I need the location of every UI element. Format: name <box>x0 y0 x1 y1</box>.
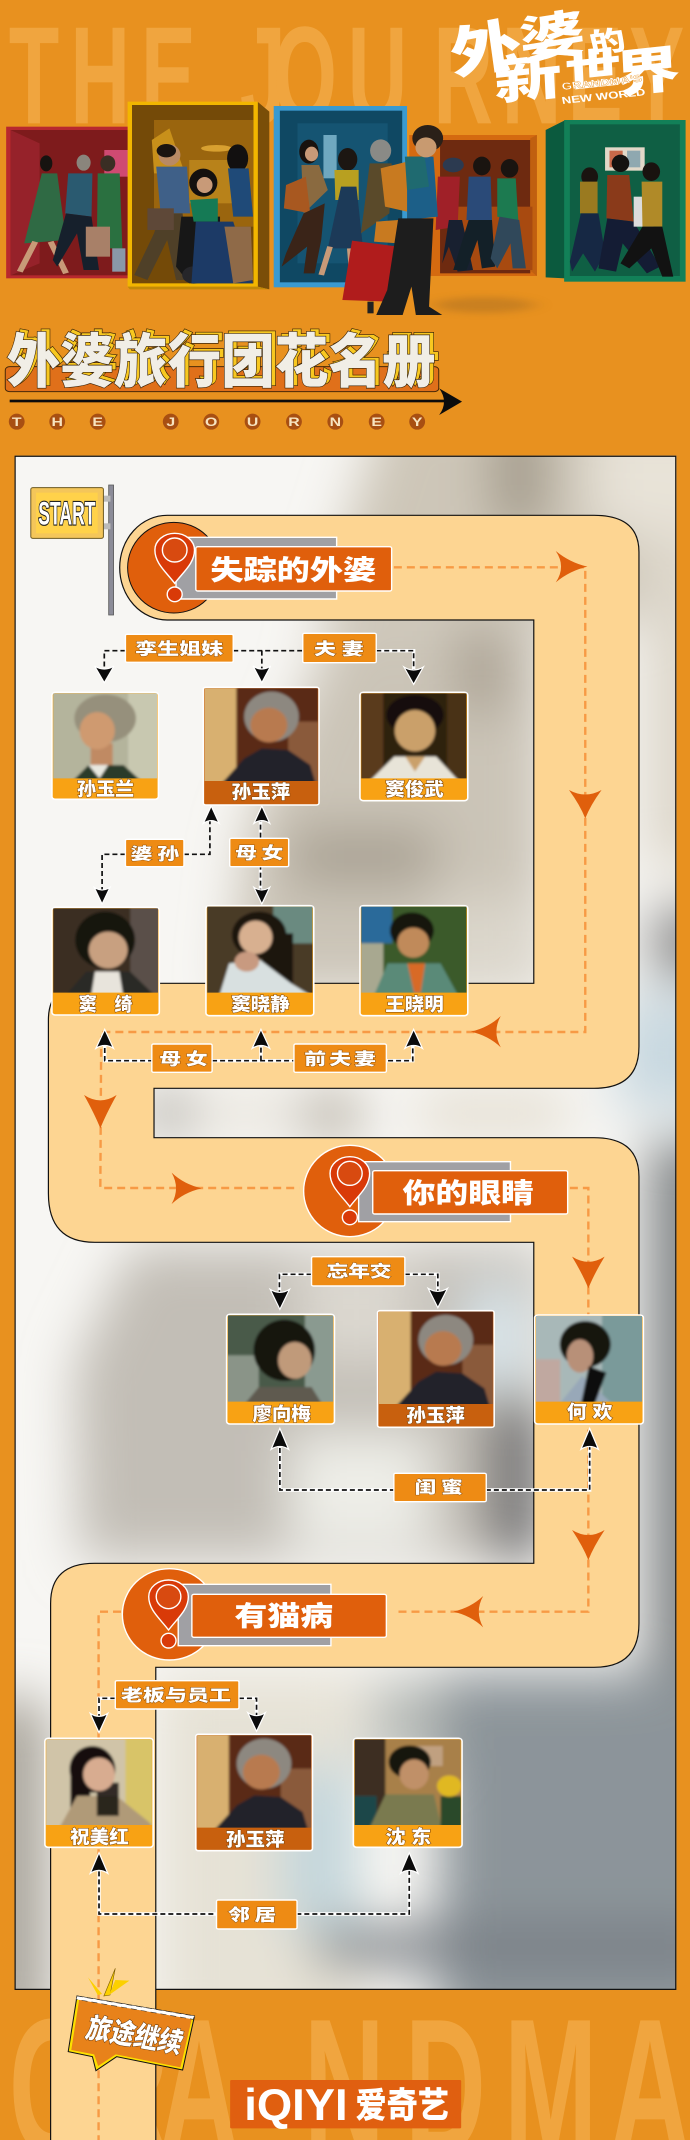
portrait card: 孙玉萍 second stop <box>370 1305 502 1427</box>
connectors: black dashed relationship lines, row two <box>94 806 270 904</box>
stop marker: 失踪的外婆 <box>128 522 392 613</box>
tag: 忘年交: 忘年交 <box>327 1262 392 1281</box>
winding road <box>48 515 639 2140</box>
tag: 老板与员工 <box>115 1681 239 1709</box>
tag: 母女 <box>230 838 289 867</box>
portrait card: 孙玉萍 second stop: 孙玉萍 <box>406 1405 465 1426</box>
heading: 外婆旅行团花名册: 外婆旅行团花名册 <box>11 327 440 392</box>
subheading: THE JOURNEY badges: N <box>330 415 341 429</box>
banner box: orange room with three travellers <box>409 135 537 276</box>
panel: blurred photo backdrop <box>14 456 676 1990</box>
portrait card: 窦俊武 <box>352 687 475 801</box>
stop marker: 你的眼睛 <box>304 1145 568 1237</box>
logo: 外婆的新世界: NEW WORLD <box>561 87 646 107</box>
route arrowheads <box>84 551 605 1627</box>
tag: 婆孙: 婆孙 <box>130 844 180 864</box>
subheading: THE JOURNEY badges: Y <box>412 415 423 429</box>
stop marker: 失踪的外婆: 失踪的外婆 <box>210 555 376 585</box>
callout: 旅途继续 <box>68 1968 195 2071</box>
portrait card: 祝美红: 祝美红 <box>70 1826 129 1848</box>
tag: 闺蜜: 闺蜜 <box>415 1478 463 1497</box>
subheading: THE JOURNEY badges: H <box>51 415 63 429</box>
portrait card: 孙玉兰 <box>44 687 166 800</box>
portrait card: 沈东 <box>346 1733 470 1848</box>
portrait card: 窦绮: 窦 绮 <box>79 994 133 1015</box>
tag: 母女: 母女 <box>235 843 283 863</box>
portrait card: 孙玉萍 third stop: 孙玉萍 <box>226 1829 285 1850</box>
logo: 外婆的新世界: 的 <box>586 24 629 59</box>
portrait card: 孙玉萍 <box>196 682 327 805</box>
arrow: heading underline <box>10 388 462 415</box>
portrait card: 窦晓静 <box>198 900 321 1016</box>
tag: 夫妻 <box>303 633 376 663</box>
subheading: THE JOURNEY badges: T <box>12 415 22 429</box>
logo: iQIYI 爱奇艺 <box>230 2080 461 2130</box>
subheading: THE JOURNEY badges <box>9 414 425 430</box>
banner box: yellow room with wheelchair scene <box>128 102 269 289</box>
portrait card: 廖向梅: 廖向梅 <box>252 1404 311 1425</box>
portrait card: 孙玉萍: 孙玉萍 <box>232 782 290 803</box>
subheading: THE JOURNEY badges: R <box>288 415 300 429</box>
stop marker: 有猫病: 有猫病 <box>235 1601 333 1632</box>
logo: iQIYI 爱奇艺: iQIYI <box>244 2081 348 2130</box>
banner box: red room with three travellers <box>6 127 129 278</box>
subheading: THE JOURNEY badges: J <box>166 415 175 429</box>
portrait card: 窦俊武: 窦俊武 <box>385 779 444 800</box>
portrait card: 王晓明: 王晓明 <box>385 994 444 1015</box>
subheading: THE JOURNEY badges: E <box>92 415 103 429</box>
portrait card: 窦晓静: 窦晓静 <box>231 994 290 1015</box>
logo: 外婆的新世界: 界 <box>613 41 681 104</box>
heading: 外婆旅行团花名册 <box>5 327 440 395</box>
heading: 外婆旅行团花名册: 外婆旅行团花名册 <box>7 330 436 395</box>
background lettering: THE JOURNEY: THEJOURNEY <box>9 0 684 154</box>
logo: 外婆的新世界: 新 <box>493 46 563 111</box>
tag: 老板与员工: 老板与员工 <box>121 1686 231 1705</box>
logo: 外婆的新世界: 世 <box>564 43 623 98</box>
sign: START: START <box>38 496 96 531</box>
logo: 外婆的新世界: 外 <box>446 12 525 87</box>
portrait card: 何欢 <box>527 1309 651 1424</box>
logo: iQIYI 爱奇艺: 爱奇艺 <box>356 2086 449 2125</box>
subheading: THE JOURNEY badges: O <box>205 415 217 429</box>
tag: 婆孙 <box>125 839 184 867</box>
portrait card: 廖向梅 <box>219 1309 342 1425</box>
stop marker: 你的眼睛: 你的眼睛 <box>403 1178 534 1208</box>
portrait card: 何欢: 何 欢 <box>567 1402 613 1423</box>
portrait card: 孙玉萍 third stop <box>188 1729 320 1851</box>
portrait card: 祝美红 <box>37 1733 161 1848</box>
logo: 外婆的新世界: 婆 <box>517 5 587 71</box>
tag: 忘年交 <box>312 1257 405 1286</box>
connectors: black dashed relationship lines, second stop <box>270 1274 598 1490</box>
logo: 外婆的新世界: GRANDMA'S <box>561 73 643 93</box>
subheading: THE JOURNEY badges: E <box>371 415 382 429</box>
tag: 母女 lower: 母女 <box>159 1049 208 1069</box>
tag: 前夫妻 <box>294 1044 386 1072</box>
route: dashed path <box>99 567 588 2140</box>
tag: 孪生姐妹: 孪生姐妹 <box>135 639 224 659</box>
callout: 旅途继续: 旅途继续 <box>83 2012 187 2059</box>
sign: START <box>31 485 114 615</box>
connectors: black dashed relationship lines, row three <box>96 1029 422 1061</box>
tag: 闺蜜 <box>394 1473 486 1502</box>
tag: 前夫妻: 前夫妻 <box>304 1049 376 1069</box>
portrait card: 王晓明 <box>352 900 475 1016</box>
banner box: green room with three travellers <box>546 120 686 282</box>
portrait card: 沈东: 沈 东 <box>385 1826 431 1848</box>
tag: 夫妻: 夫妻 <box>314 639 364 659</box>
stop marker: 有猫病 <box>122 1569 386 1660</box>
tag: 邻居 <box>217 1900 297 1929</box>
connectors: black dashed relationship lines, row one <box>95 651 423 684</box>
tag: 邻居: 邻居 <box>228 1905 276 1925</box>
logo: 外婆的新世界 <box>446 5 681 111</box>
portrait card: 窦绮 <box>44 902 167 1015</box>
tag: 母女 lower <box>152 1044 212 1072</box>
subheading: THE JOURNEY badges: U <box>247 415 258 429</box>
banner box: blue room with three women <box>274 106 407 287</box>
banner figure: grandma with red suitcase <box>342 125 535 315</box>
portrait card: 孙玉兰: 孙玉兰 <box>77 778 134 800</box>
connectors: black dashed relationship lines, third stop <box>90 1698 418 1914</box>
tag: 孪生姐妹 <box>125 634 233 662</box>
